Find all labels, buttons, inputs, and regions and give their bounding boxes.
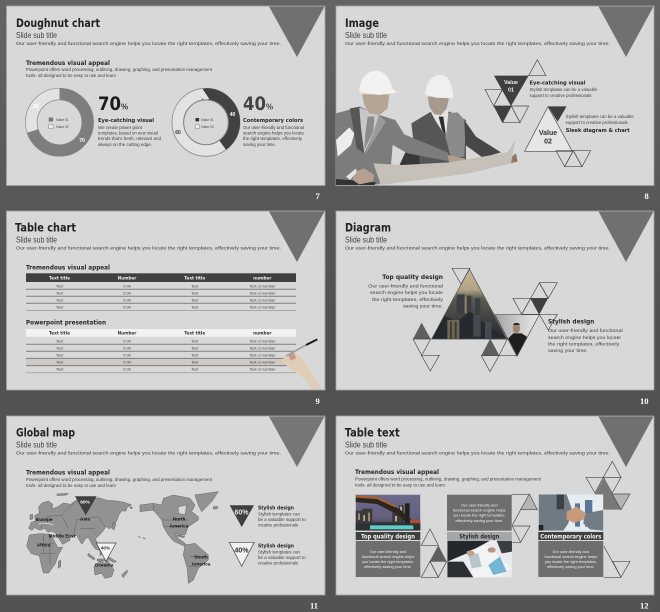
table 1: 0.00: [123, 291, 132, 296]
title: Diagram: [345, 222, 391, 234]
card: stylish design: Stylish design: [459, 533, 499, 540]
page number 11: 11: [310, 600, 318, 610]
text: sleek diagram: Stylish templates can be a valuable: [566, 114, 634, 119]
triangle grid: [413, 268, 557, 372]
text: eye-catching visual: Eye-catching visual: [530, 80, 586, 86]
doughnut chart 40 percent: 40: [230, 112, 235, 118]
corner triangle: [269, 212, 324, 262]
hand holding a marker: [282, 339, 322, 389]
doughnut chart 70 percent: Value 01: [56, 118, 69, 122]
table 2: Text title: [49, 330, 70, 336]
stat 40 percent: search engine helps you locate: [243, 131, 305, 136]
subtitle: Slide sub title: [345, 440, 387, 450]
map marker 60 percent: 60%: [80, 500, 91, 506]
value 01 label: Value: [504, 80, 518, 86]
stat 70 percent: always on the cutting edge.: [98, 142, 152, 147]
page number 12: 12: [640, 600, 648, 610]
section body: Powerpoint offers word processing, outlining, drawing, graphing, and presentation management: [26, 67, 213, 72]
table 2: number: [253, 330, 272, 336]
left man: [336, 71, 518, 186]
stat 40 percent: Contemporary colors: [243, 118, 304, 124]
map region labels: North: [173, 516, 185, 522]
corner triangle: [269, 416, 324, 467]
corner triangle: [598, 212, 654, 262]
table 2: Text: [56, 345, 64, 350]
photo: bridge at night: [356, 495, 420, 531]
table 1: Text: [191, 298, 199, 303]
title: Doughnut chart: [16, 17, 101, 30]
title: Table chart: [15, 222, 77, 234]
right man: [398, 75, 501, 169]
card: contemporary colors: functional search engine helps: [545, 554, 597, 559]
card: contemporary colors: Contemporary colors: [540, 533, 602, 540]
legend 60 percent: creative professionals: [258, 522, 298, 527]
subtitle: Slide sub title: [16, 440, 57, 450]
table 2: Text or number: [249, 360, 276, 365]
legend 40 percent: creative professionals: [258, 560, 298, 565]
description: Our user-friendly and functional search engine helps you locate the right templates, effectively saving your time.: [16, 246, 281, 250]
panel: table chart slide: [6, 211, 325, 390]
text: eye-catching visual: Stylish templates can be a valuable: [530, 87, 598, 92]
card: top quality design: you locate the right templates,: [362, 559, 414, 564]
legend 60 percent: [230, 505, 306, 527]
title: Image: [345, 17, 379, 30]
page number 10: 10: [640, 396, 648, 406]
table 2: Text: [56, 367, 64, 372]
section body: Powerpoint offers word processing, outlining, drawing, graphing, and presentation management: [355, 476, 542, 481]
value 02 label: [539, 130, 557, 146]
card: stylish design: effectively saving your time.: [455, 518, 503, 523]
table 2: 0.00: [123, 345, 132, 350]
text: eye-catching visual: [530, 80, 598, 98]
page number 8: 8: [644, 191, 649, 201]
map region labels: Europe: [36, 517, 53, 523]
card: contemporary colors: [538, 494, 603, 577]
card: contemporary colors: you locate the right templates,: [545, 559, 597, 564]
table 1: Text: [191, 305, 199, 310]
legend 60 percent: Stylish design: [258, 506, 294, 512]
table 2: Text: [191, 367, 199, 372]
subtitle: Slide sub title: [345, 236, 387, 244]
table 2: 0.00: [123, 367, 132, 372]
table 2: 0.00: [123, 360, 132, 365]
stat 40 percent: %: [266, 102, 273, 112]
map marker 40 percent: [96, 543, 116, 561]
doughnut chart 40 percent: Value 01: [201, 118, 214, 122]
card: top quality design: Our user-friendly and: [370, 549, 406, 554]
table 1: Text: [56, 298, 64, 303]
table 2: Text or number: [249, 352, 276, 358]
stat 70 percent: %: [121, 102, 128, 112]
value 02 label: 02: [544, 138, 552, 146]
legend 40 percent: Stylish design: [258, 544, 294, 550]
world map: Eurasia, Africa, Oceania: [27, 493, 132, 578]
page number 9: 9: [316, 396, 320, 406]
table heading 2: Powerpoint presentation: [26, 319, 106, 326]
table 1: Text: [56, 284, 64, 289]
text: sleek diagram: support to creative professionals: [566, 120, 628, 125]
card: stylish design: Our user-friendly and: [461, 502, 498, 508]
text: sleek diagram: Sleek diagram & chart: [566, 128, 630, 134]
section body: tools- all designed to be easy to use and learn: [26, 483, 117, 488]
map marker 60 percent: [75, 496, 97, 515]
table 2: [26, 329, 296, 373]
doughnut chart 40 percent: [172, 88, 240, 156]
legend 40 percent: Stylish templates can: [258, 550, 301, 554]
subtitle: Slide sub title: [16, 31, 57, 40]
section body: [355, 476, 542, 487]
table 2: Text title: [184, 330, 205, 336]
map region labels: America: [170, 524, 189, 530]
photo: handshake: [539, 494, 603, 531]
table 2: Text or number: [249, 367, 276, 372]
table 1: Text: [56, 291, 64, 296]
text: eye-catching visual: support to creative professionals: [530, 93, 592, 98]
blueprint: [373, 140, 515, 185]
section heading: Tremendous visual appeal: [26, 470, 110, 477]
panel: doughnut chart slide: [6, 6, 325, 186]
table 1: Text title: [49, 276, 70, 280]
card: top quality design: Top quality design: [361, 533, 415, 540]
triangle photo: businessman: [496, 315, 538, 356]
card: top quality design: functional search engine helps: [362, 554, 414, 559]
text: top quality design: saving your time.: [403, 304, 443, 308]
corner triangle: [598, 6, 654, 57]
table 1: Number: [118, 276, 137, 280]
description: Our user-friendly and functional search engine helps you locate the right templates, effectively saving your time.: [345, 246, 610, 250]
table 1: 0.00: [123, 305, 132, 310]
table 1: Text or number: [249, 291, 276, 296]
map region labels: Middle East: [49, 534, 76, 540]
text: stylish design: saving your time.: [548, 348, 588, 353]
legend 40 percent: [229, 542, 306, 566]
section body: Powerpoint offers word processing, outlining, drawing, graphing, and presentation management: [26, 477, 213, 482]
stat 40 percent: saving your time.: [243, 142, 276, 147]
doughnut chart 70 percent: Value 02: [56, 125, 69, 129]
corner triangle: [269, 6, 324, 57]
outline triangles: [421, 461, 630, 577]
card: stylish design: you locate the right templates,: [453, 513, 505, 518]
stat 70 percent: trends that's fresh, relevant and: [98, 136, 162, 141]
table 2: Text: [56, 338, 64, 343]
map marker 40 percent: 40%: [101, 546, 111, 552]
photo: charts on paper: [447, 541, 512, 577]
table 2: Text: [191, 352, 199, 358]
stat 40 percent: 40: [243, 93, 266, 115]
description: Our user-friendly and functional search engine helps you locate the right templates, effectively saving your time.: [345, 451, 610, 456]
map region labels: America: [192, 562, 211, 568]
table 2: Text or number: [249, 345, 276, 350]
value 01 label: [504, 80, 518, 94]
table heading 1: Tremendous visual appeal: [26, 264, 110, 272]
section body: tools- all designed to be easy to use and learn: [355, 482, 446, 487]
table 2: Text: [191, 360, 199, 365]
table 2: 0.00: [123, 338, 132, 343]
table 2: Number: [118, 330, 137, 336]
description: Our user-friendly and functional search engine helps you locate the right templates, effectively saving your time.: [16, 41, 281, 46]
card: contemporary colors: effectively saving your time.: [547, 564, 595, 569]
stat 70 percent: We create power point: [98, 125, 143, 130]
card: contemporary colors: Our user-friendly and: [553, 549, 589, 554]
subtitle: Slide sub title: [16, 236, 57, 244]
panel: image slide: [336, 6, 654, 186]
doughnut chart 70 percent: 30: [33, 104, 39, 110]
table 1: Text or number: [249, 284, 276, 289]
card: top quality design: effectively saving your time.: [364, 564, 412, 569]
section heading: Tremendous visual appeal: [355, 469, 439, 476]
stat 40 percent: Our user-friendly and functional: [243, 125, 304, 130]
title: Table text: [345, 426, 400, 440]
table 1: Text: [56, 305, 64, 310]
table 1: number: [253, 276, 272, 280]
table 2: Text: [191, 345, 199, 350]
text: top quality design: search engine helps you locate: [370, 290, 444, 295]
stat 70 percent: [98, 93, 162, 147]
legend 60 percent: 60%: [234, 510, 249, 516]
panel: diagram slide: [336, 211, 654, 390]
text: top quality design: the right templates, effectively: [372, 297, 444, 302]
doughnut chart 70 percent: 70: [79, 138, 85, 144]
table 1: Text or number: [249, 305, 276, 310]
table 1: [26, 273, 296, 310]
table 2: Text: [191, 338, 199, 343]
legend 60 percent: be a valuable support to: [258, 517, 306, 522]
card: stylish design: functional search engine helps: [453, 507, 506, 512]
table 1: 0.00: [123, 284, 132, 289]
text: stylish design: Our user-friendly and functional: [548, 328, 623, 333]
text: stylish design: Stylish design: [548, 318, 595, 326]
description: Our user-friendly and functional search engine helps you locate the right templates, effectively saving your time.: [345, 41, 610, 46]
corner triangle: [598, 416, 654, 467]
section body: tools- all designed to be easy to use and learn: [26, 73, 117, 78]
stat 40 percent: [243, 93, 305, 147]
text: stylish design: the right templates, effectively: [548, 341, 620, 346]
text: top quality design: Our user-friendly and functional: [368, 284, 443, 288]
section body: [26, 477, 213, 488]
legend 60 percent: Stylish templates can: [258, 512, 301, 516]
doughnut chart 70 percent: [26, 88, 94, 156]
legend 40 percent: 40%: [234, 548, 249, 554]
stat 70 percent: Eye-catching visual: [98, 118, 154, 124]
table 1: Text title: [184, 276, 205, 280]
world map: Americas: [130, 492, 218, 583]
doughnut chart 40 percent: 60: [175, 130, 181, 136]
map region labels: Asia: [80, 516, 90, 522]
doughnut chart 40 percent: Value 02: [201, 125, 214, 129]
value 02 label: Value: [539, 130, 557, 137]
panel: table text slide: [336, 416, 654, 595]
text: top quality design: [368, 273, 444, 308]
table 2: Text: [56, 352, 64, 358]
text: stylish design: [548, 318, 623, 353]
table 1: Text: [191, 284, 199, 289]
table 2: Text or number: [249, 338, 276, 343]
table 2: 0.00: [123, 352, 132, 358]
stat 70 percent: 70: [98, 93, 121, 115]
text: top quality design: Top quality design: [382, 273, 443, 281]
triangle photo: city skyline: [430, 268, 508, 340]
map region labels: [36, 516, 211, 568]
text: sleek diagram: [566, 114, 634, 134]
section heading: Tremendous visual appeal: [26, 60, 110, 67]
value 01 label: 01: [508, 88, 514, 94]
triangle diagram: [485, 60, 591, 167]
table 1: Text or number: [249, 298, 276, 303]
photo: engineers in hard hats reading a plan: [336, 71, 518, 186]
map region labels: South: [194, 554, 208, 560]
table 1: 0.00: [123, 298, 132, 303]
card: top quality design: [356, 495, 420, 577]
map region labels: Africa: [37, 542, 51, 548]
table 2: Text: [56, 360, 64, 365]
map region labels: Oceania: [95, 562, 114, 568]
stat 70 percent: templates, based on new visual: [98, 131, 158, 136]
description: Our user-friendly and functional search engine helps you locate the right templates, effectively saving your time.: [16, 451, 281, 456]
table 1: Text: [191, 291, 199, 296]
card: stylish design: [447, 495, 512, 577]
subtitle: Slide sub title: [345, 31, 387, 40]
title: Global map: [16, 426, 75, 440]
text: stylish design: search engine helps you locate: [548, 335, 622, 340]
legend 40 percent: be a valuable support to: [258, 555, 306, 560]
section body: [26, 67, 213, 78]
panel: global map slide: [6, 416, 325, 595]
page number 7: 7: [316, 191, 320, 201]
stat 40 percent: the right templates, effectively: [243, 136, 303, 141]
